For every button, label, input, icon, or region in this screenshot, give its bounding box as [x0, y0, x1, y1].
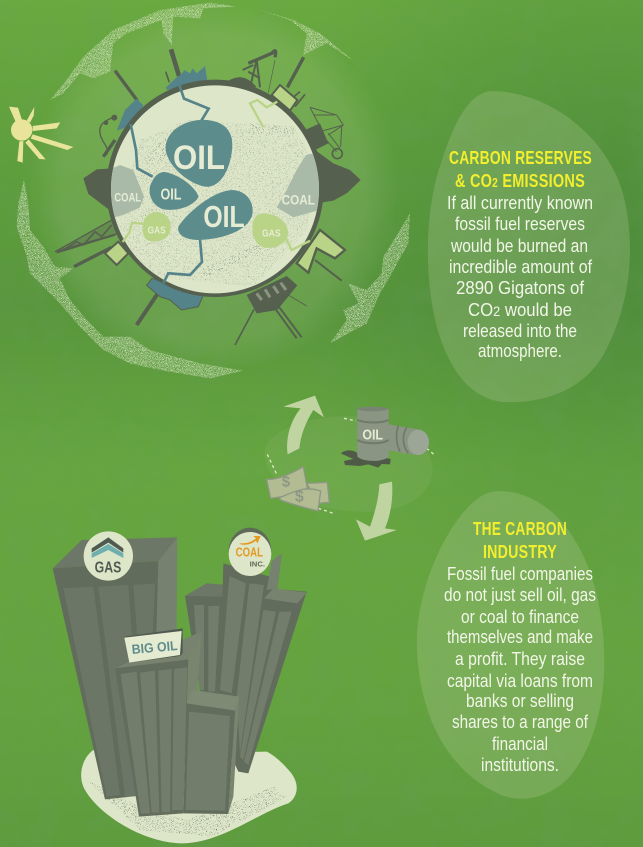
sign: gas: GAS: [95, 560, 121, 577]
icon: banknotes: $: [282, 475, 290, 491]
cycle backdrop ellipse: [265, 416, 433, 512]
derrick: [55, 220, 118, 253]
planet disc: [106, 80, 324, 297]
dark coal mounds: [83, 150, 361, 212]
oil deposit small: [150, 172, 199, 210]
icon: banknotes: [267, 467, 329, 511]
industry around planet: [55, 49, 345, 345]
oil spill: [341, 450, 391, 468]
sign: coal inc: COAL: [236, 546, 263, 560]
factory top: [166, 66, 207, 90]
text block: the carbon industry: capital via loans from: [447, 670, 593, 691]
building: front block: [183, 690, 239, 814]
dragline: [305, 107, 343, 159]
factory left: [117, 99, 143, 131]
building: big oil: [115, 632, 202, 817]
text block: carbon reserves: would be burned an: [450, 235, 588, 256]
oil deposit medium: [178, 190, 253, 240]
gas pipes: [123, 100, 310, 250]
gas deposit left: [143, 212, 171, 242]
text block: carbon reserves: incredible amount of: [449, 256, 593, 277]
text block: the carbon industry: Fossil fuel companies: [447, 563, 593, 584]
text block: the carbon industry: themselves and make: [447, 626, 593, 647]
building top right: [272, 85, 297, 111]
text block: carbon reserves: CO2 would be: [468, 299, 572, 320]
sign: coal inc: [229, 528, 271, 576]
disc speckle: [113, 120, 317, 287]
sign: big oil: BIG OIL: [131, 638, 178, 657]
oil deposit medium: OIL: [203, 200, 245, 234]
text block: carbon reserves: released into the: [463, 320, 577, 341]
text block: the carbon industry: financial: [492, 733, 548, 754]
atmosphere fragments: [17, 3, 410, 378]
oil deposit large: OIL: [173, 139, 225, 177]
buildings illustration: [53, 528, 307, 843]
text block: the carbon industry: a profit. They raise: [455, 648, 585, 669]
atmosphere halo: [28, 2, 398, 372]
text block: the carbon industry: [444, 563, 596, 775]
text block: the carbon industry: shares to a range of: [452, 711, 589, 732]
upright barrel: OIL: [362, 427, 383, 443]
text block: carbon reserves: [447, 192, 593, 361]
text block: the carbon industry: or coal to finance: [461, 606, 579, 627]
sign: gas: [84, 531, 133, 581]
rig bottom: [247, 276, 297, 313]
splat machine: [100, 115, 117, 157]
arrow down: [356, 482, 397, 541]
heading: carbon reserves: & CO2 EMISSIONS: [455, 170, 585, 191]
dashes: [267, 418, 435, 513]
cycle illustration: [265, 396, 435, 541]
text block: carbon reserves: 2890 Gigatons of: [456, 277, 585, 298]
coal deposits: [108, 152, 322, 218]
text block: carbon reserves: atmosphere.: [478, 340, 562, 361]
text block: carbon reserves: If all currently known: [447, 192, 593, 213]
upright barrel: [357, 407, 389, 461]
L building right: [297, 230, 345, 273]
text panel blob: carbon reserves: [428, 91, 630, 402]
gas deposit right: GAS: [262, 228, 281, 239]
label: coal left: COAL: [114, 190, 141, 204]
ground patch: [81, 750, 297, 843]
heading: carbon reserves: CARBON RESERVES: [449, 147, 592, 168]
text panel blob: carbon industry: [417, 491, 604, 799]
oil pipes: [131, 84, 209, 283]
oil deposit small: OIL: [160, 187, 181, 204]
heading: carbon reserves: [449, 147, 592, 191]
lying barrel: [389, 424, 429, 455]
sign: big oil: [124, 628, 183, 663]
arrow up: [283, 396, 324, 454]
sign: coal inc: INC.: [250, 560, 265, 569]
icon: banknotes: $: [295, 489, 304, 506]
heading: the carbon industry: INDUSTRY: [483, 541, 557, 562]
text block: the carbon industry: do not just sell oil, gas: [444, 584, 596, 605]
label: coal right: COAL: [282, 192, 315, 208]
pumpjack: [227, 51, 276, 93]
heading: the carbon industry: THE CARBON: [473, 518, 567, 539]
gas deposit right: [252, 213, 288, 248]
heading: the carbon industry: [473, 518, 567, 562]
text block: the carbon industry: institutions.: [481, 754, 559, 775]
building: gas tower: [53, 537, 177, 799]
icon: sun: [9, 107, 73, 163]
text block: carbon reserves: fossil fuel reserves: [455, 213, 585, 234]
gas deposit left: GAS: [148, 226, 166, 237]
building: coal tower: [185, 553, 307, 773]
oil deposit large: [166, 120, 232, 187]
factory bottom left: [147, 278, 203, 310]
planet illustration: [9, 2, 410, 378]
text block: the carbon industry: banks or selling: [466, 690, 574, 711]
